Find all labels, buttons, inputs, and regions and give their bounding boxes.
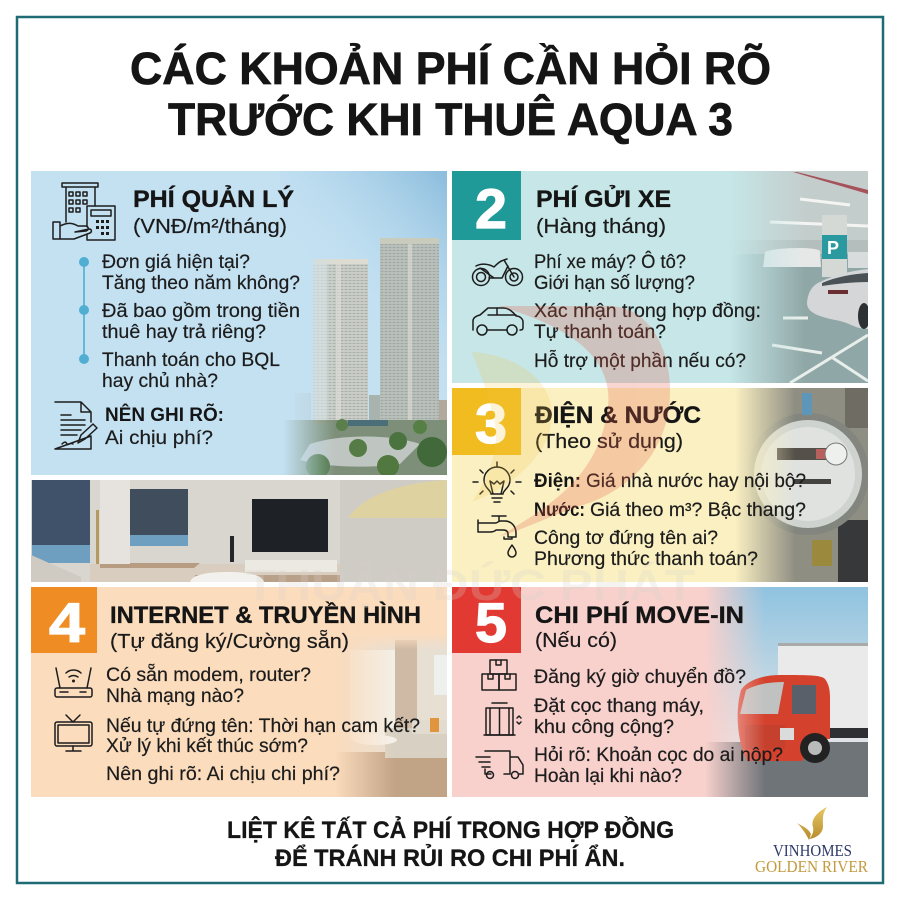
icon: building with calculator and hand (53, 183, 115, 240)
subheading: if any: (Nếu có) (535, 630, 617, 652)
logo: vinhomes golden river: VINHOMES (773, 841, 852, 860)
timeline bullets (79, 257, 89, 364)
heading: chi phí move-in: CHI PHÍ MOVE-IN (535, 601, 744, 629)
photo: apartment towers (280, 171, 447, 478)
note: nên ghi rõ: Ai chịu phí? (105, 428, 213, 449)
panel: chi phí move-in (452, 587, 868, 797)
watermark: company name: THUẬN ĐỨC PHÁT (245, 560, 695, 610)
questions list (102, 252, 300, 392)
title (130, 43, 771, 145)
watermark: company D logo (472, 306, 670, 536)
icon: moving boxes (482, 660, 516, 690)
heading: điện và nước: ĐIỆN & NƯỚC (535, 401, 701, 429)
number badge 5 (452, 587, 521, 654)
heading: phí gửi xe: PHÍ GỬI XE (536, 184, 671, 213)
questions list: Tăng theo năm không? (102, 273, 300, 294)
questions list: Thanh toán cho BQL (102, 350, 280, 371)
number badge 3: 3 (475, 392, 507, 455)
panel: phí quản lý (31, 171, 447, 478)
subheading: by usage: (Theo sử dụng) (535, 431, 683, 453)
heading: internet và truyền hình: INTERNET & TRUYỀN HÌNH (110, 601, 421, 629)
subheading: monthly: (Hàng tháng) (536, 216, 666, 238)
number badge 4: 4 (49, 591, 85, 654)
questions list: Hoàn lại khi nào? (534, 766, 682, 787)
title: CÁC KHOẢN PHÍ CẦN HỎI RÕ (130, 43, 771, 94)
questions list: Hỏi rõ: Khoản cọc do ai nộp? (534, 745, 783, 766)
footer message: LIỆT KÊ TẤT CẢ PHÍ TRONG HỢP ĐỒNG (227, 815, 674, 844)
panel: phí gửi xe (452, 171, 870, 383)
subheading: unit: (VNĐ/m²/tháng) (133, 216, 287, 238)
title: TRƯỚC KHI THUÊ AQUA 3 (168, 94, 733, 145)
photo: living room with sofa (343, 640, 447, 797)
questions list: Đặt cọc thang máy, (534, 696, 704, 717)
questions list (534, 471, 806, 570)
questions list: Đăng ký giờ chuyển đồ? (534, 667, 746, 688)
questions list: Phí xe máy? Ô tô? (534, 251, 686, 273)
questions list: Tự thanh toán? (534, 322, 666, 343)
photo: parking garage: P (827, 238, 839, 258)
note: nên ghi rõ: NÊN GHI RÕ: (105, 404, 224, 426)
icon: light bulb (473, 462, 521, 502)
questions list: Nếu tự đứng tên: Thời hạn cam kết? (106, 716, 420, 737)
number badge 2 (452, 171, 521, 240)
photo: parking garage (740, 171, 868, 383)
note: nên ghi rõ (105, 404, 224, 449)
subheading: self-register: (Tự đăng ký/Cường sẵn) (110, 630, 349, 653)
questions list: Đã bao gồm trong tiền (102, 301, 300, 322)
photo: moving truck (700, 587, 868, 797)
icon: delivery truck (476, 751, 523, 778)
number badge 2: 2 (475, 177, 507, 240)
questions list: Đơn giá hiện tại? (102, 252, 250, 273)
icon: car (473, 308, 523, 335)
footer message (227, 815, 674, 872)
number badge 3 (452, 388, 521, 455)
questions list: Giới hạn số lượng? (534, 273, 695, 294)
icon: television (55, 715, 92, 751)
questions list: Hỗ trợ một phần nếu có? (534, 350, 746, 372)
questions list: hay chủ nhà? (102, 371, 218, 392)
questions list: Nên ghi rõ: Ai chịu chi phí? (106, 764, 340, 785)
questions list: Giá nhà nước hay nội bộ? (586, 471, 806, 492)
questions list: Giá theo m³? Bậc thang? (590, 500, 806, 521)
questions list: Nước: (534, 500, 585, 521)
footer message: ĐỂ TRÁNH RỦI RO CHI PHÍ ẨN. (275, 843, 625, 872)
questions list: Có sẵn modem, router? (106, 665, 311, 686)
number badge 4 (31, 587, 97, 654)
panel: điện và nước (452, 388, 869, 582)
questions list: Điện: (534, 471, 581, 492)
questions list: Nhà mạng nào? (106, 686, 244, 707)
icon: elevator (484, 703, 521, 735)
logo: vinhomes golden river (755, 807, 869, 876)
questions list: khu công cộng? (534, 717, 674, 738)
questions list (534, 251, 761, 372)
questions list (534, 667, 783, 787)
questions list: Xử lý khi kết thúc sớm? (106, 736, 308, 757)
icon: motorbike (472, 259, 522, 286)
panel: internet và truyền hình (31, 587, 447, 797)
number badge 5: 5 (475, 591, 507, 654)
questions list: Phương thức thanh toán? (534, 549, 758, 570)
questions list (106, 665, 420, 785)
icon: water tap (478, 516, 516, 557)
photo: water meter (730, 388, 869, 582)
questions list: Xác nhận trong hợp đồng: (534, 301, 761, 322)
heading: phí quản lý: PHÍ QUẢN LÝ (133, 184, 294, 213)
logo: vinhomes golden river: GOLDEN RIVER (755, 857, 869, 876)
questions list: Công tơ đứng tên ai? (534, 528, 718, 549)
icon: wifi router (55, 668, 92, 697)
questions list: thuê hay trả riêng? (102, 322, 266, 343)
photo: living room strip (31, 480, 447, 582)
icon: document and pen (55, 402, 97, 449)
